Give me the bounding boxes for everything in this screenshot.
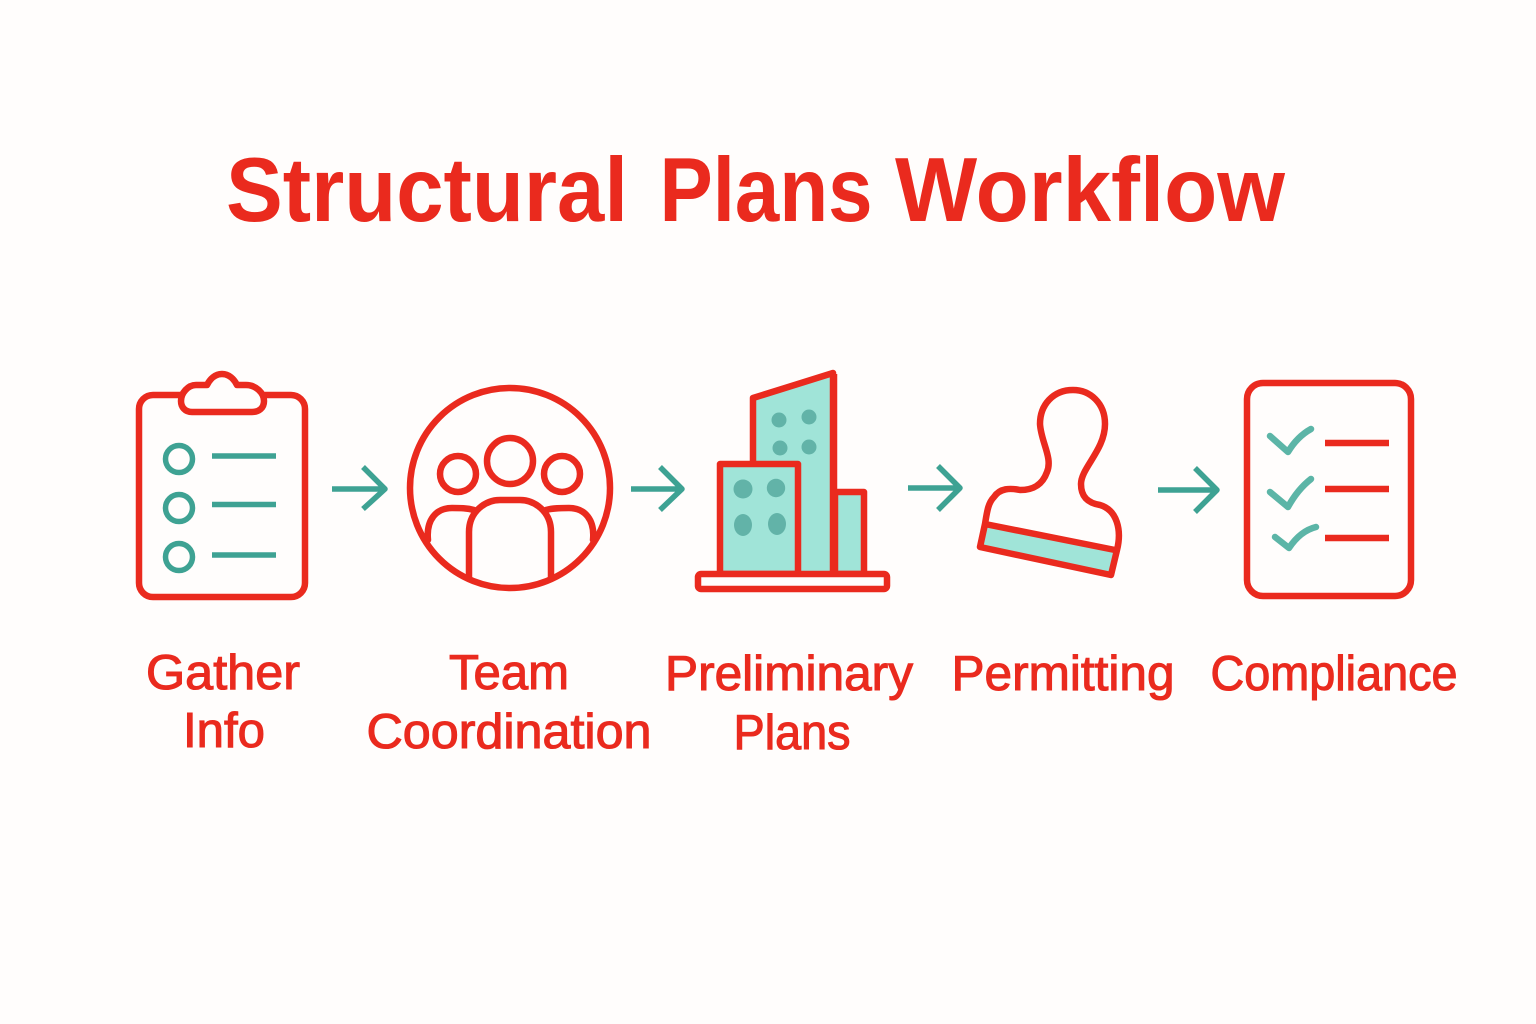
icon: clipboard [139, 374, 305, 597]
label: Preliminary Plans: Plans [734, 706, 850, 760]
arrow 4 [1158, 468, 1217, 512]
icon: checklist [1247, 383, 1411, 596]
arrow 1 [332, 467, 385, 509]
label: Preliminary Plans: Preliminary [665, 647, 913, 701]
icon: buildings [698, 373, 887, 589]
label: Gather Info [146, 646, 300, 758]
title: Structural [226, 140, 628, 241]
title: Plans [660, 140, 872, 241]
title: Workflow [895, 140, 1285, 241]
label: Compliance: Compliance [1210, 647, 1458, 701]
label: Permitting: Permitting [952, 647, 1174, 701]
label: Gather Info: Gather [146, 646, 300, 700]
label: Gather Info: Info [183, 704, 265, 758]
label: Team Coordination: Team [449, 646, 569, 700]
label: Team Coordination [366, 646, 652, 759]
arrow 3 [908, 466, 960, 510]
title [226, 140, 1285, 241]
icon: team [410, 388, 610, 588]
icon: stamp [980, 390, 1119, 575]
label: Team Coordination: Coordination [366, 705, 652, 759]
arrow 2 [631, 467, 682, 510]
label: Preliminary Plans [665, 647, 913, 760]
